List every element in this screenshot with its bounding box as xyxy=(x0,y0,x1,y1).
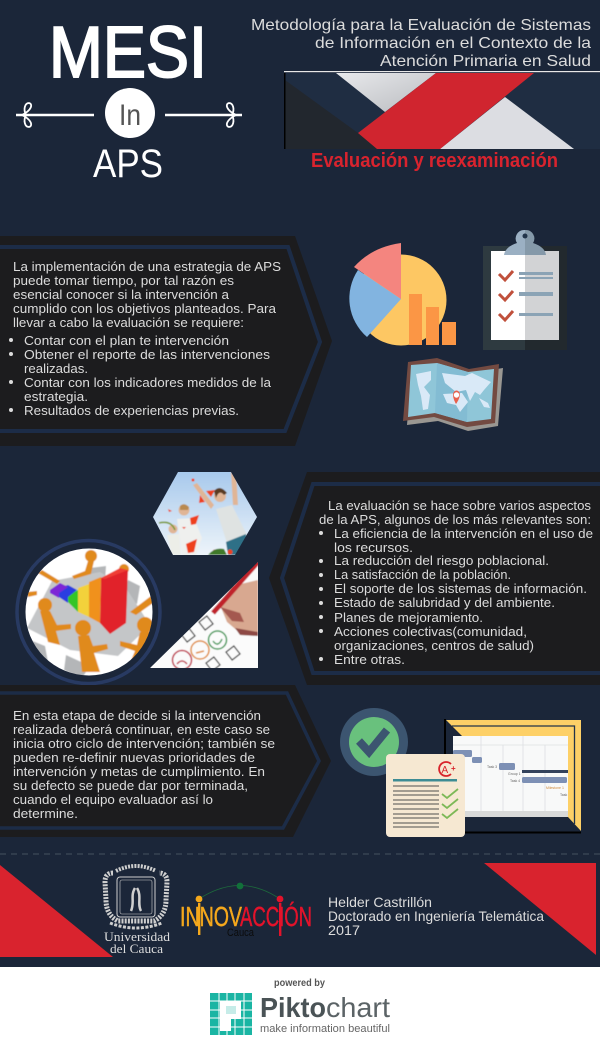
text: decision: intervención y metas de cumplimiento. En xyxy=(13,764,265,779)
logo: Innovacción Cauca: INNOV xyxy=(180,901,242,932)
grade mark A+: A xyxy=(442,765,448,776)
logo: Universidad del Cauca: del Cauca xyxy=(110,941,163,956)
title: methodology: de Información en el Contexto de la xyxy=(315,35,591,52)
list: evaluated aspects: Planes de mejoramiento. xyxy=(334,610,483,625)
text: decision: realizada deberá continuar, en este caso se xyxy=(13,722,270,737)
icon: world map xyxy=(403,358,503,431)
list: evaluated aspects: Acciones colectivas(comunidad, xyxy=(334,624,527,639)
title: methodology: Atención Primaria en Salud xyxy=(380,53,591,70)
icon: Piktochart logo xyxy=(210,993,252,1035)
subtitle: Evaluación y reexaminación: Evaluación y reexaminación xyxy=(311,150,558,172)
list: requirements: realizadas. xyxy=(24,361,88,376)
icon: clipboard xyxy=(483,230,567,350)
author credit: Helder Castrillón xyxy=(328,894,432,910)
text: evaluation intro: La evaluación se hace sobre varios aspectos xyxy=(328,498,592,513)
text: introduction xyxy=(13,259,281,330)
title: methodology xyxy=(251,17,591,70)
logo: Innovacción Cauca: Cauca xyxy=(227,927,255,939)
list: evaluated aspects: La satisfacción de la población. xyxy=(334,567,511,582)
list: requirements xyxy=(9,333,272,418)
footer band: Piktochart: powered by xyxy=(274,978,325,989)
image: framed gantt chart xyxy=(445,719,581,832)
text: introduction: puede tomar tiempo, por tal razón es xyxy=(13,273,235,288)
list: evaluated aspects: El soporte de los sistemas de información. xyxy=(334,581,587,596)
list: evaluated aspects: los recursos. xyxy=(334,540,413,555)
footer band: Piktochart xyxy=(0,967,600,1047)
icon: green check badge xyxy=(340,708,408,776)
text: introduction: llevar a cabo la evaluación se requiere: xyxy=(13,315,244,330)
text: introduction: cumplido con los objetivos planteados. Para xyxy=(13,301,277,316)
logo: Universidad del Cauca: Universidad xyxy=(104,929,171,944)
list: requirements: Resultados de experiencias previas. xyxy=(24,403,239,418)
logo: Innovacción Cauca xyxy=(180,883,312,939)
list: evaluated aspects: La reducción del riesgo poblacional. xyxy=(334,553,549,568)
footer band: Piktochart: Pikto xyxy=(260,992,326,1023)
footer band: Piktochart: make information beautiful xyxy=(260,1023,390,1035)
list: requirements: Contar con el plan te intervención xyxy=(24,333,229,348)
text: decision: su defecto se puede dar por terminada, xyxy=(13,778,248,793)
text: decision: pueden re-definir nuevas prioridades de xyxy=(13,750,255,765)
text: decision: determine. xyxy=(13,806,78,821)
text: evaluation intro xyxy=(319,498,592,527)
logo: Innovacción Cauca: ACCIÓN xyxy=(240,901,312,932)
author credit: Doctorado en Ingeniería Telemática xyxy=(328,908,544,924)
logo word APS: APS xyxy=(93,142,163,186)
image: graded report xyxy=(386,754,465,837)
header banner xyxy=(284,73,600,149)
text: introduction: La implementación de una estrategia de APS xyxy=(13,259,281,274)
text: introduction: esencial conocer si la intervención a xyxy=(13,287,230,302)
logo: Universidad del Cauca xyxy=(104,866,171,956)
panel: evaluated aspects xyxy=(269,472,600,685)
photo: family in hexagon xyxy=(153,472,257,555)
footer triangle left xyxy=(0,865,113,957)
badge: In xyxy=(105,88,155,138)
list: requirements: estrategia. xyxy=(24,389,88,404)
author credit xyxy=(328,894,544,938)
list: evaluated aspects: Entre otras. xyxy=(334,652,405,667)
text: decision: En esta etapa de decide si la intervención xyxy=(13,708,261,723)
title: methodology: Metodología para la Evaluación de Sistemas xyxy=(251,17,591,34)
image: framed gantt chart: Milestone 1 xyxy=(546,786,564,790)
list: evaluated aspects: organizaciones, centros de salud) xyxy=(334,638,534,653)
photo: meeting with 3D bar chart xyxy=(17,540,160,684)
badge: In: In xyxy=(119,99,141,132)
photo: satisfaction survey xyxy=(150,560,260,671)
footer triangle right xyxy=(484,863,596,955)
panel: requirements xyxy=(0,236,332,446)
text: decision xyxy=(13,708,275,821)
text: decision: inicia otro ciclo de intervención; también se xyxy=(13,736,275,751)
image: framed gantt chart: Task 3 xyxy=(487,765,497,769)
icon: right arrow xyxy=(165,103,242,127)
grade mark A+: + xyxy=(451,764,456,773)
image: framed gantt chart: Task 4 xyxy=(510,779,520,783)
author credit: 2017 xyxy=(328,922,360,938)
footer band: Piktochart: chart xyxy=(326,992,390,1023)
text: evaluation intro: de la APS, algunos de los más relevantes son: xyxy=(319,512,591,527)
image: framed gantt chart: Task xyxy=(560,793,567,797)
panel: decision xyxy=(0,685,331,837)
image: framed gantt chart: Group 1 xyxy=(508,772,521,776)
list: evaluated aspects: La eficiencia de la intervención en el uso de xyxy=(334,526,593,541)
list: requirements: Contar con los indicadores medidos de la xyxy=(24,375,272,390)
text: decision: cuando el equipo evaluador así lo xyxy=(13,792,213,807)
grade mark A+ xyxy=(439,762,456,776)
icon: pie and bar chart xyxy=(349,243,456,346)
list: evaluated aspects: Estado de salubridad y del ambiente. xyxy=(334,595,555,610)
list: evaluated aspects xyxy=(319,526,593,667)
list: requirements: Obtener el reporte de las intervenciones xyxy=(24,347,271,362)
logo: MESI In APS xyxy=(16,13,242,186)
icon: left arrow xyxy=(16,103,94,127)
logo word MESI: MESI xyxy=(49,13,207,93)
